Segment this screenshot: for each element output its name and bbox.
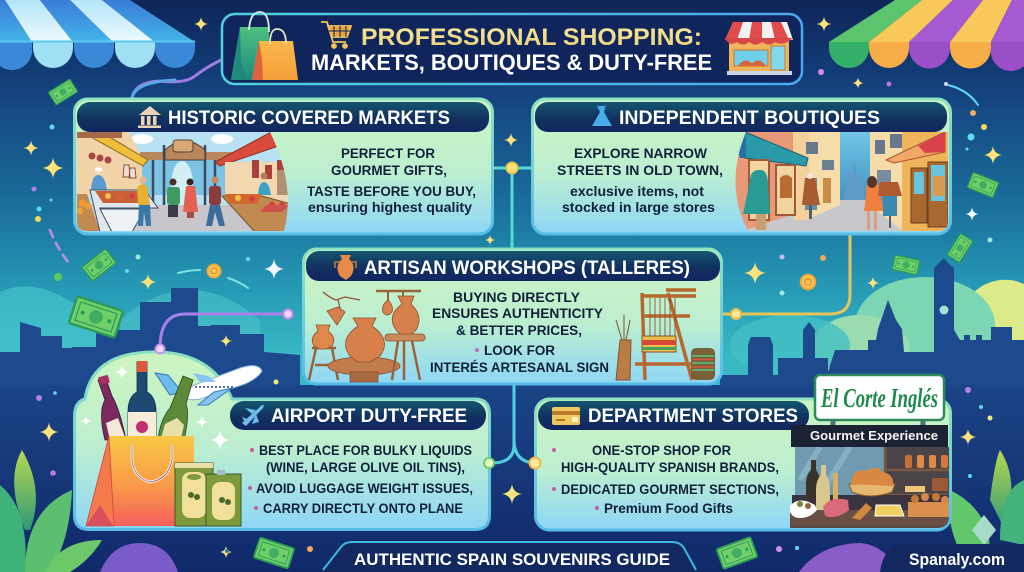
airport header bar [230, 401, 486, 430]
market text: PERFECT FOR [341, 146, 435, 161]
icon: plane [242, 405, 264, 426]
gourmet illustration [789, 447, 952, 530]
left awning [0, 0, 195, 70]
duty-free text: BEST PLACE FOR BULKY LIQUIDS [259, 443, 472, 458]
boutique header bar [535, 102, 947, 132]
panel: department stores [536, 375, 952, 530]
duty-free text: CARRY DIRECTLY ONTO PLANE [263, 501, 463, 516]
el corte ingles sign: El Corte Inglés [820, 383, 938, 413]
site credit [880, 544, 1024, 572]
department text: DEDICATED GOURMET SECTIONS, [561, 482, 779, 497]
panel: artisan workshops [304, 249, 722, 384]
buying advice text: & BETTER PRICES, [456, 323, 582, 338]
buying advice text: ENSURES AUTHENTICITY [432, 306, 603, 321]
loom illustration [616, 290, 715, 380]
panel: historic covered markets [74, 99, 492, 234]
footer banner [322, 542, 697, 572]
boutique text: STREETS IN OLD TOWN, [557, 163, 723, 178]
buying advice text: BUYING DIRECTLY [453, 290, 580, 305]
boutique text: EXPLORE NARROW [574, 146, 707, 161]
duty-free text: AVOID LUGGAGE WEIGHT ISSUES, [256, 481, 473, 496]
heading: DEPARTMENT STORES [588, 405, 798, 427]
department header bar [538, 401, 809, 430]
icon: temple [138, 106, 161, 128]
icon: cart [321, 22, 351, 48]
gourmet experience banner: Gourmet Experience [810, 428, 938, 443]
footer banner: AUTHENTIC SPAIN SOUVENIRS GUIDE [354, 551, 670, 569]
boutique text: stocked in large stores [562, 200, 715, 215]
boutique text [557, 146, 723, 215]
market illustration [76, 130, 297, 232]
heading: INDEPENDENT BOUTIQUES [619, 107, 880, 129]
connector lines [132, 60, 850, 463]
duty-free text [248, 443, 473, 516]
plants and hills [0, 450, 1024, 572]
connector node dots [156, 344, 540, 468]
icon: vase [335, 255, 356, 280]
panel: airport duty-free [74, 352, 490, 530]
heading: ARTISAN WORKSHOPS (TALLERES) [364, 257, 690, 279]
icon: dress [592, 105, 612, 126]
duty-free text: (WINE, LARGE OLIVE OIL TINS), [266, 460, 465, 475]
right awning [829, 0, 1024, 71]
title banner [222, 12, 802, 84]
buying advice text [430, 290, 609, 375]
market text: TASTE BEFORE YOU BUY, [307, 184, 476, 199]
buying advice text: INTERÉS ARTESANAL SIGN [430, 360, 609, 375]
heading: HISTORIC COVERED MARKETS [168, 107, 450, 129]
department text: Premium Food Gifts [604, 501, 733, 516]
market text: GOURMET GIFTS, [331, 163, 447, 178]
gourmet experience banner [791, 425, 948, 447]
wine bottles and bag [81, 361, 241, 526]
airplane illustration [155, 366, 262, 405]
pottery illustration [309, 291, 425, 382]
icon: credit card [552, 407, 580, 425]
artisan header bar [306, 251, 720, 281]
heading line 2: MARKETS, BOUTIQUES & DUTY-FREE [311, 50, 712, 75]
heading line 1: PROFESSIONAL SHOPPING: [361, 24, 702, 51]
el corte ingles sign [815, 375, 944, 420]
boutique text: exclusive items, not [570, 184, 705, 199]
heading: AIRPORT DUTY-FREE [271, 405, 467, 427]
buying advice text: LOOK FOR [484, 343, 555, 358]
boutique illustration [730, 130, 950, 232]
site credit: Spanaly.com [909, 551, 1005, 569]
store sign posts [833, 420, 923, 426]
department text: ONE-STOP SHOP FOR [592, 443, 731, 458]
panel: independent boutiques [532, 99, 950, 234]
icon: shopping bags [231, 12, 298, 80]
market text [307, 146, 476, 215]
department text [552, 443, 779, 516]
icon: shop front [725, 22, 793, 75]
market text: ensuring highest quality [308, 200, 473, 215]
department text: HIGH-QUALITY SPANISH BRANDS, [561, 460, 779, 475]
market header bar [77, 102, 489, 132]
